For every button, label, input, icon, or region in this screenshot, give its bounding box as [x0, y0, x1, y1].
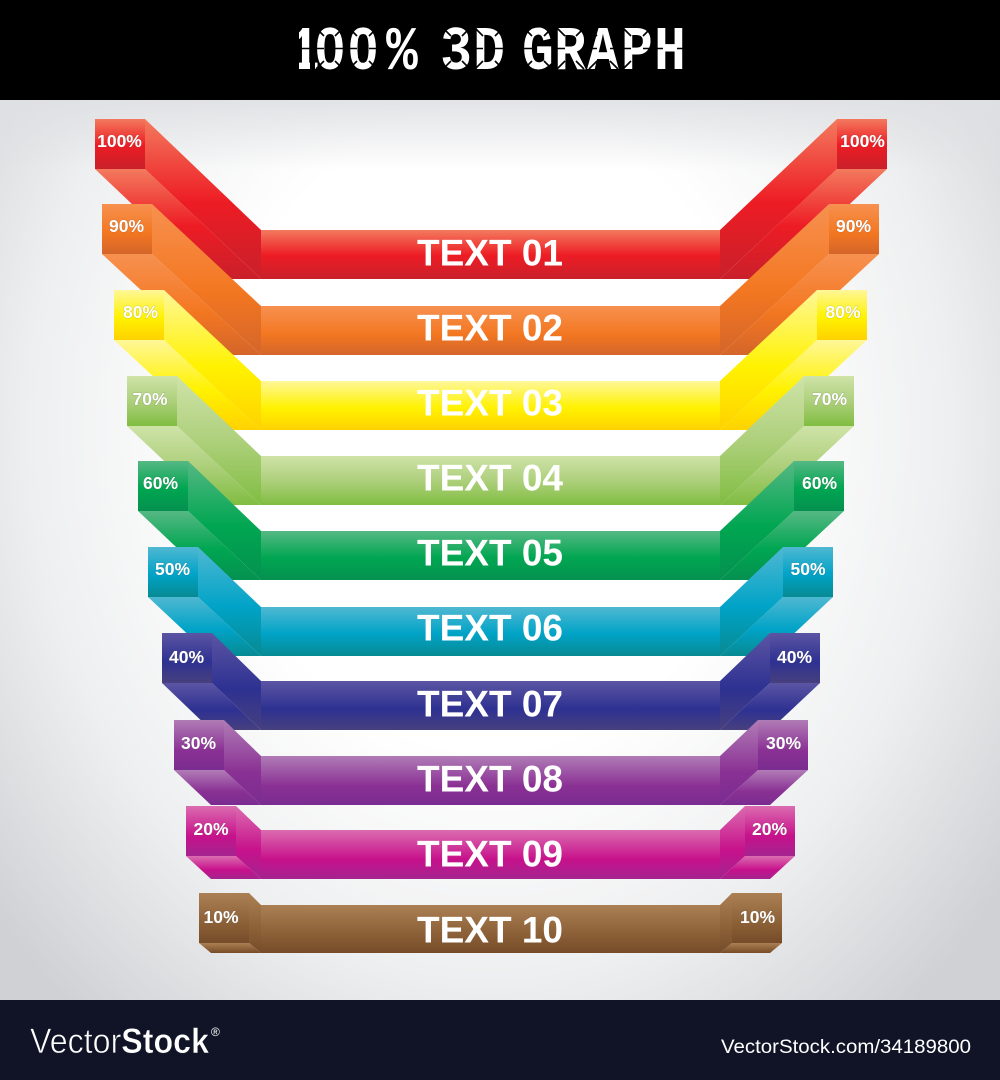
bar 05: green 60%: 60% — [143, 473, 178, 493]
bar 02: orange 90%: 90% — [109, 216, 144, 236]
bar 04: light green 70%: TEXT 04 — [417, 458, 563, 498]
bar 05: green 60%: 60% — [802, 473, 837, 493]
bar 10: brown 10%: 10% — [203, 907, 239, 927]
bar 08: purple 30%: 30% — [766, 733, 801, 753]
footer url: VectorStock.com/34189800 — [721, 1037, 971, 1058]
bar 09: magenta 20%: 20% — [752, 819, 787, 839]
bar 01: red 100%: TEXT 01 — [417, 232, 563, 274]
bar 08: purple 30% — [174, 720, 808, 805]
bar 06: teal 50%: 50% — [155, 559, 190, 579]
bar 01: red 100%: 100% — [97, 131, 142, 151]
bar 07: navy 40% — [162, 633, 820, 730]
bar 02: orange 90%: 90% — [836, 216, 871, 236]
bar 09: magenta 20%: TEXT 09 — [417, 834, 563, 874]
title: 100% 3D GRAPH — [288, 18, 686, 88]
bar 07: navy 40%: 40% — [777, 647, 812, 667]
bar 06: teal 50%: TEXT 06 — [417, 608, 563, 648]
bar 03: yellow 80%: 80% — [123, 302, 158, 322]
bar 10: brown 10%: TEXT 10 — [417, 910, 563, 950]
bar 10: brown 10% — [199, 893, 782, 953]
bar 10: brown 10%: 10% — [740, 907, 775, 927]
bar 07: navy 40%: 40% — [169, 647, 204, 667]
bar 04: light green 70%: 70% — [812, 389, 847, 409]
title banner — [0, 0, 1000, 100]
bar 03: yellow 80% — [114, 290, 867, 430]
footer logo: VectorStock — [30, 1022, 209, 1061]
bar 04: light green 70% — [127, 376, 854, 505]
bar 05: green 60%: TEXT 05 — [417, 532, 563, 574]
bar 09: magenta 20%: 20% — [193, 819, 229, 839]
bar 02: orange 90% — [102, 204, 879, 355]
bar 05: green 60% — [138, 461, 844, 580]
bar 09: magenta 20% — [186, 806, 795, 879]
bar 03: yellow 80%: TEXT 03 — [417, 382, 563, 424]
bar 01: red 100% — [95, 119, 887, 279]
bar 04: light green 70%: 70% — [132, 389, 168, 409]
bar 06: teal 50%: 50% — [790, 559, 826, 579]
bar 01: red 100%: 100% — [840, 131, 885, 151]
footer bar — [0, 1000, 1000, 1080]
bar 08: purple 30%: 30% — [181, 733, 216, 753]
bar 07: navy 40%: TEXT 07 — [417, 684, 563, 724]
bar 02: orange 90%: TEXT 02 — [417, 308, 563, 348]
registered mark: ® — [211, 1025, 220, 1039]
bar 08: purple 30%: TEXT 08 — [417, 758, 563, 800]
bar 06: teal 50% — [148, 547, 833, 656]
bar 03: yellow 80%: 80% — [825, 302, 861, 322]
